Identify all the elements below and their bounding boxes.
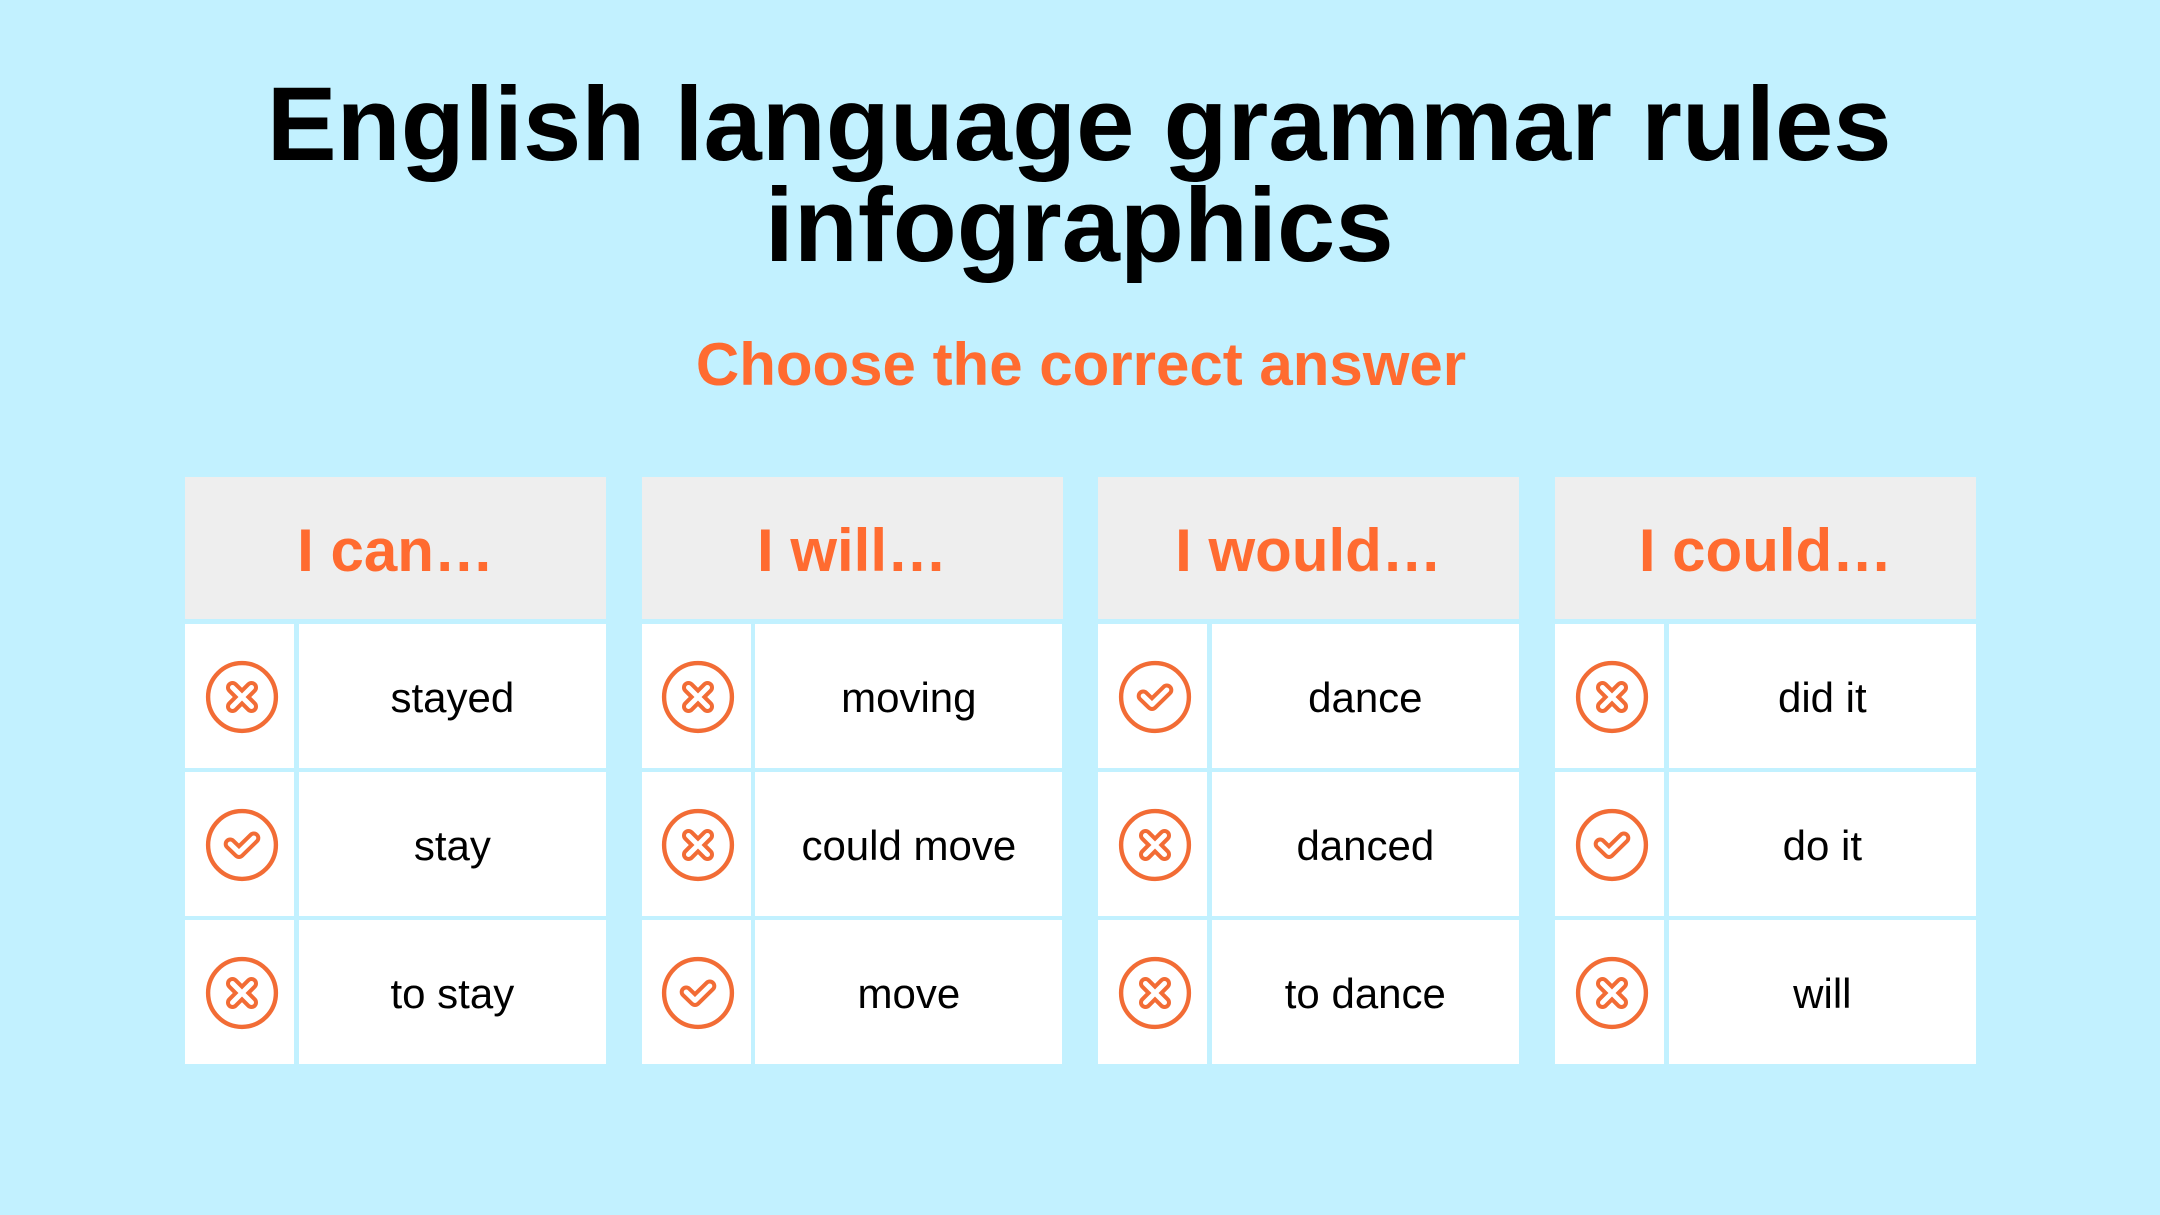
heading: I will	[642, 477, 1062, 619]
text: will: will	[1793, 970, 1852, 1017]
icon: check	[1555, 772, 1664, 916]
icon: cross	[1098, 772, 1207, 916]
heading: I could: I could…	[1639, 517, 1892, 584]
text: could move	[755, 772, 1062, 916]
text: will	[1669, 920, 1976, 1064]
subtitle: Choose the correct answer	[696, 331, 1466, 398]
text: to stay: to stay	[390, 970, 514, 1017]
text: stay: stay	[414, 822, 491, 869]
text: danced	[1212, 772, 1519, 916]
text: stay	[299, 772, 606, 916]
text: stayed	[299, 624, 606, 768]
heading: I would	[1098, 477, 1519, 619]
icon: check	[642, 920, 750, 1064]
icon: check	[185, 772, 294, 916]
icon: cross	[1555, 624, 1664, 768]
text: could move: could move	[801, 822, 1016, 869]
text: to stay	[299, 920, 606, 1064]
icon: cross	[642, 772, 750, 916]
option: moving	[642, 624, 1062, 768]
text: did it: did it	[1778, 674, 1867, 721]
icon: cross	[185, 920, 294, 1064]
option: did it	[1555, 624, 1976, 768]
heading: I will: I will…	[757, 517, 947, 584]
heading: I could	[1555, 477, 1976, 619]
panel: I would	[1098, 477, 1519, 1064]
heading: I can: I can…	[297, 517, 494, 584]
option: danced	[1098, 772, 1519, 916]
text: do it: do it	[1783, 822, 1862, 869]
option: move	[642, 920, 1062, 1064]
title: infographics	[765, 167, 1394, 284]
icon: check	[1098, 624, 1207, 768]
text: dance: dance	[1308, 674, 1423, 721]
panel: I can	[185, 477, 606, 1064]
text: move	[755, 920, 1062, 1064]
heading: I can	[185, 477, 606, 619]
option: stayed	[185, 624, 606, 768]
text: to dance	[1212, 920, 1519, 1064]
option: stay	[185, 772, 606, 916]
text: dance	[1212, 624, 1519, 768]
panel: I could	[1555, 477, 1976, 1064]
text: stayed: stayed	[390, 674, 514, 721]
text: move: move	[857, 970, 960, 1017]
title: English language grammar rules	[267, 66, 1892, 183]
icon: cross	[185, 624, 294, 768]
option: will	[1555, 920, 1976, 1064]
option: dance	[1098, 624, 1519, 768]
text: did it	[1669, 624, 1976, 768]
text: danced: danced	[1296, 822, 1434, 869]
option: do it	[1555, 772, 1976, 916]
text: moving	[755, 624, 1062, 768]
icon: cross	[642, 624, 750, 768]
icon: cross	[1555, 920, 1664, 1064]
icon: cross	[1098, 920, 1207, 1064]
heading: I would: I would…	[1175, 517, 1442, 584]
option: to dance	[1098, 920, 1519, 1064]
option: could move	[642, 772, 1062, 916]
text: do it	[1669, 772, 1976, 916]
option: to stay	[185, 920, 606, 1064]
text: to dance: to dance	[1285, 970, 1446, 1017]
text: moving: moving	[841, 674, 977, 721]
panel: I will	[642, 477, 1063, 1064]
title	[267, 66, 1892, 284]
